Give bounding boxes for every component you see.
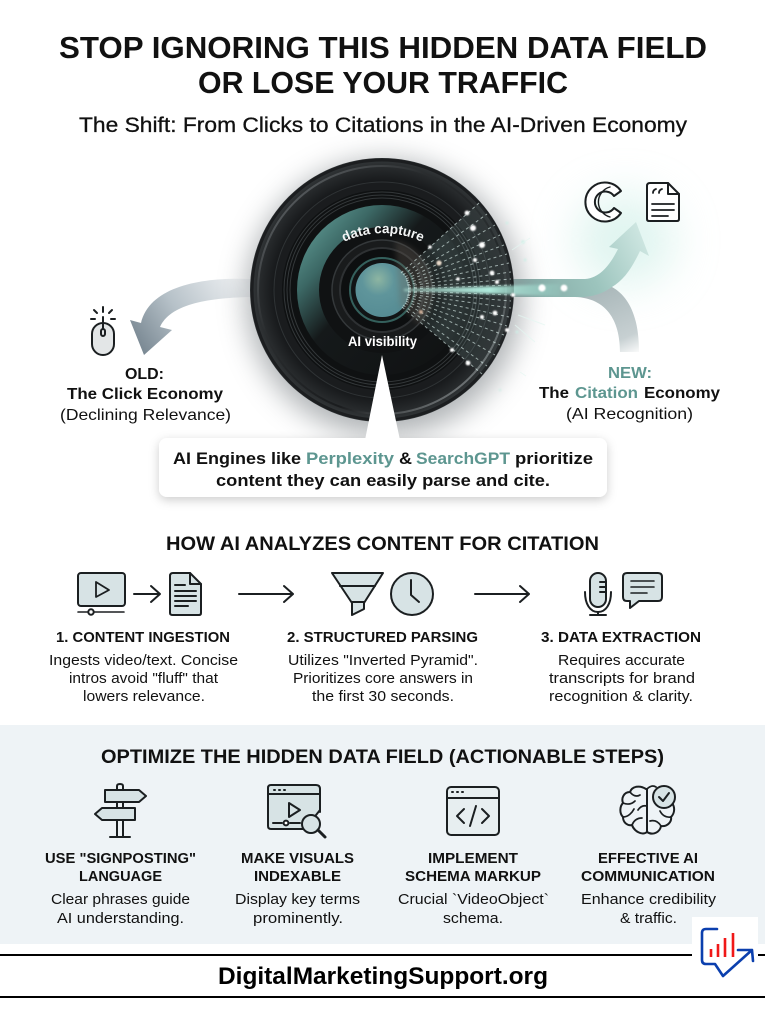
step 3 text: recognition & clarity. <box>549 688 693 705</box>
icon: citation C <box>585 182 621 222</box>
step 2 text: the first 30 seconds. <box>312 688 454 705</box>
step 3 text <box>541 629 701 705</box>
step 2 text: Utilizes "Inverted Pyramid". <box>288 652 478 669</box>
glow: citation area <box>575 194 675 286</box>
action 3 text <box>398 851 549 927</box>
action 2 text: prominently. <box>253 910 343 927</box>
action 1 text: LANGUAGE <box>79 869 162 885</box>
callout: prioritize <box>515 449 593 468</box>
title: OR LOSE YOUR TRAFFIC <box>198 65 568 100</box>
action 1 text <box>45 851 196 927</box>
callout: & <box>399 449 412 468</box>
lens label: AI visibility: AI visibility <box>348 334 417 349</box>
new economy label: Citation <box>575 385 638 402</box>
lens label: data capture: data capture <box>342 226 424 241</box>
step 2 text <box>287 629 478 705</box>
step 1 text: Ingests video/text. Concise <box>49 652 238 669</box>
action 1 text: USE "SIGNPOSTING" <box>45 851 196 867</box>
icon: signpost <box>95 784 146 837</box>
title <box>59 30 707 100</box>
icon: microphone and speech bubble <box>585 573 662 615</box>
action 2 text <box>235 851 360 927</box>
icon: code window <box>447 787 499 835</box>
heading: optimize: OPTIMIZE THE HIDDEN DATA FIELD (ACTIONABLE STEPS) <box>101 747 664 768</box>
action 4 text: COMMUNICATION <box>581 869 715 885</box>
icon: video to document <box>78 573 201 615</box>
action 1 text: AI understanding. <box>57 910 184 927</box>
new economy label: The <box>539 385 569 402</box>
callout: content they can easily parse and cite. <box>216 471 550 490</box>
step 1 text <box>49 629 238 705</box>
action 3 text: SCHEMA MARKUP <box>405 869 541 885</box>
action 3 text: IMPLEMENT <box>428 851 518 867</box>
step 1 text: 1. CONTENT INGESTION <box>56 629 230 646</box>
action 4 text: EFFECTIVE AI <box>598 851 698 867</box>
subtitle: The Shift: From Clicks to Citations in the AI-Driven Economy <box>79 113 687 137</box>
action 2 text: INDEXABLE <box>254 869 341 885</box>
callout: AI Engines like <box>173 449 301 468</box>
old economy label: The Click Economy <box>67 386 223 403</box>
action 4 text: Enhance credibility <box>581 891 717 908</box>
action 2 text: MAKE VISUALS <box>241 851 354 867</box>
icon: visual search <box>268 785 325 837</box>
new economy label: Economy <box>644 385 720 402</box>
callout: SearchGPT <box>416 449 511 468</box>
panel: optimize band <box>0 725 765 944</box>
action 3 text: schema. <box>443 910 503 927</box>
icon: brain with check <box>620 786 675 834</box>
action 4 text <box>581 851 717 927</box>
new economy label: NEW: <box>608 365 652 382</box>
step 1 text: intros avoid "fluff" that <box>69 670 219 687</box>
old economy label <box>60 366 231 424</box>
icon: funnel and clock <box>332 573 433 615</box>
action 2 text: Display key terms <box>235 891 360 908</box>
callout <box>159 355 607 497</box>
title: STOP IGNORING THIS HIDDEN DATA FIELD <box>59 30 707 65</box>
old economy label: (Declining Relevance) <box>60 407 231 424</box>
old economy label: OLD: <box>125 366 164 383</box>
step 3 text: Requires accurate <box>558 652 685 669</box>
action 4 text: & traffic. <box>620 910 677 927</box>
callout: Perplexity <box>306 449 395 468</box>
step 2 text: Prioritizes core answers in <box>293 670 473 687</box>
arrow: new citation branch <box>505 222 649 352</box>
lens <box>246 158 522 436</box>
icon: quoted document <box>647 183 679 221</box>
logo <box>692 917 758 978</box>
arrow: step 2 to 3 <box>475 586 529 602</box>
data rays and beam <box>401 203 567 392</box>
icon: mouse click <box>91 307 115 355</box>
heading: how AI analyzes: HOW AI ANALYZES CONTENT FOR CITATION <box>166 534 599 555</box>
new economy label <box>539 365 720 423</box>
new economy label: (AI Recognition) <box>566 406 693 423</box>
footer: DigitalMarketingSupport.org <box>218 963 548 990</box>
step 1 text: lowers relevance. <box>83 688 205 705</box>
arrow: old click economy <box>130 279 250 355</box>
step 2 text: 2. STRUCTURED PARSING <box>287 629 478 646</box>
action 3 text: Crucial `VideoObject` <box>398 891 549 908</box>
action 1 text: Clear phrases guide <box>51 891 190 908</box>
step 3 text: 3. DATA EXTRACTION <box>541 629 701 646</box>
arrow: step 1 to 2 <box>239 586 293 602</box>
step 3 text: transcripts for brand <box>549 670 695 687</box>
